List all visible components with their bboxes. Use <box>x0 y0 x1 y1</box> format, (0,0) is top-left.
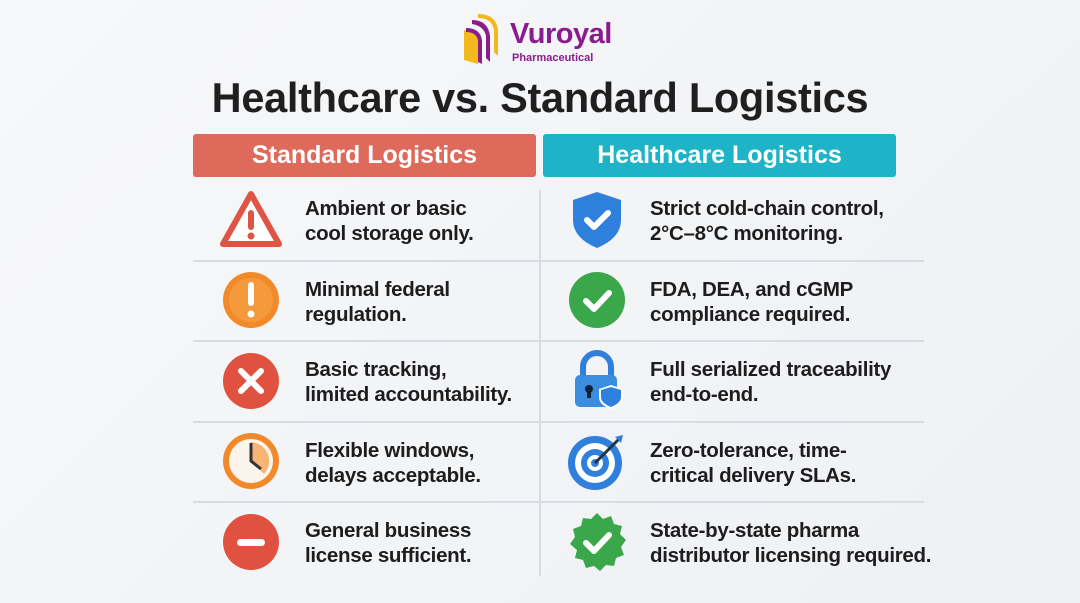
header: healthcare: Healthcare Logistics <box>597 141 842 169</box>
text: regulation: regulation. <box>305 303 406 326</box>
icon: warning triangle <box>220 191 282 247</box>
text: license: license sufficient. <box>305 544 471 567</box>
text: windows: Flexible windows, <box>305 439 474 462</box>
text: traceability <box>650 358 892 406</box>
text: license: General business <box>305 519 471 542</box>
text: license <box>305 519 471 567</box>
icon: orange exclamation <box>223 272 279 328</box>
panel: standard logistics column <box>220 191 512 570</box>
text: licensing: distributor licensing required. <box>650 544 931 567</box>
text: delivery: critical delivery SLAs. <box>650 464 856 487</box>
text: tracking: limited accountability. <box>305 383 512 406</box>
text: tracking <box>305 358 512 406</box>
text: storage: cool storage only. <box>305 222 474 245</box>
text: licensing: State-by-state pharma <box>650 519 859 542</box>
header: healthcare <box>543 134 896 177</box>
text: traceability: end-to-end. <box>650 383 758 406</box>
text: cold chain: Strict cold-chain control, <box>650 197 884 220</box>
text: storage <box>305 197 474 245</box>
icon: shield <box>573 192 621 248</box>
text: windows: delays acceptable. <box>305 464 481 487</box>
text: compliance: compliance required. <box>650 303 850 326</box>
brand subtitle: Pharmaceutical <box>512 52 593 64</box>
icon: minus <box>223 514 279 570</box>
header: standard: Standard Logistics <box>252 141 477 169</box>
icon: badge check <box>570 513 626 571</box>
brand name: Vuroyal <box>510 18 612 50</box>
icon: red x <box>223 353 279 409</box>
text: cold chain: 2°C–8°C monitoring. <box>650 222 843 245</box>
text: tracking: Basic tracking, <box>305 358 446 381</box>
icon: green check <box>569 272 625 328</box>
text: delivery: Zero-tolerance, time- <box>650 439 846 462</box>
icon: logo mark <box>464 14 498 64</box>
header: standard <box>193 134 536 177</box>
text: compliance <box>650 278 853 326</box>
text: licensing <box>650 519 931 567</box>
text: traceability: Full serialized traceability <box>650 358 891 381</box>
title: Healthcare vs. Standard Logistics <box>212 74 868 121</box>
text: cold chain <box>650 197 884 245</box>
logo <box>464 14 612 64</box>
text: regulation <box>305 278 450 326</box>
text: windows <box>305 439 481 487</box>
icon: clock <box>223 433 279 489</box>
text: storage: Ambient or basic <box>305 197 467 220</box>
icon: target <box>568 435 623 490</box>
text: compliance: FDA, DEA, and cGMP <box>650 278 853 301</box>
icon: padlock <box>575 350 623 409</box>
panel: healthcare logistics column <box>568 192 931 571</box>
text: delivery <box>650 439 856 487</box>
text: regulation: Minimal federal <box>305 278 450 301</box>
